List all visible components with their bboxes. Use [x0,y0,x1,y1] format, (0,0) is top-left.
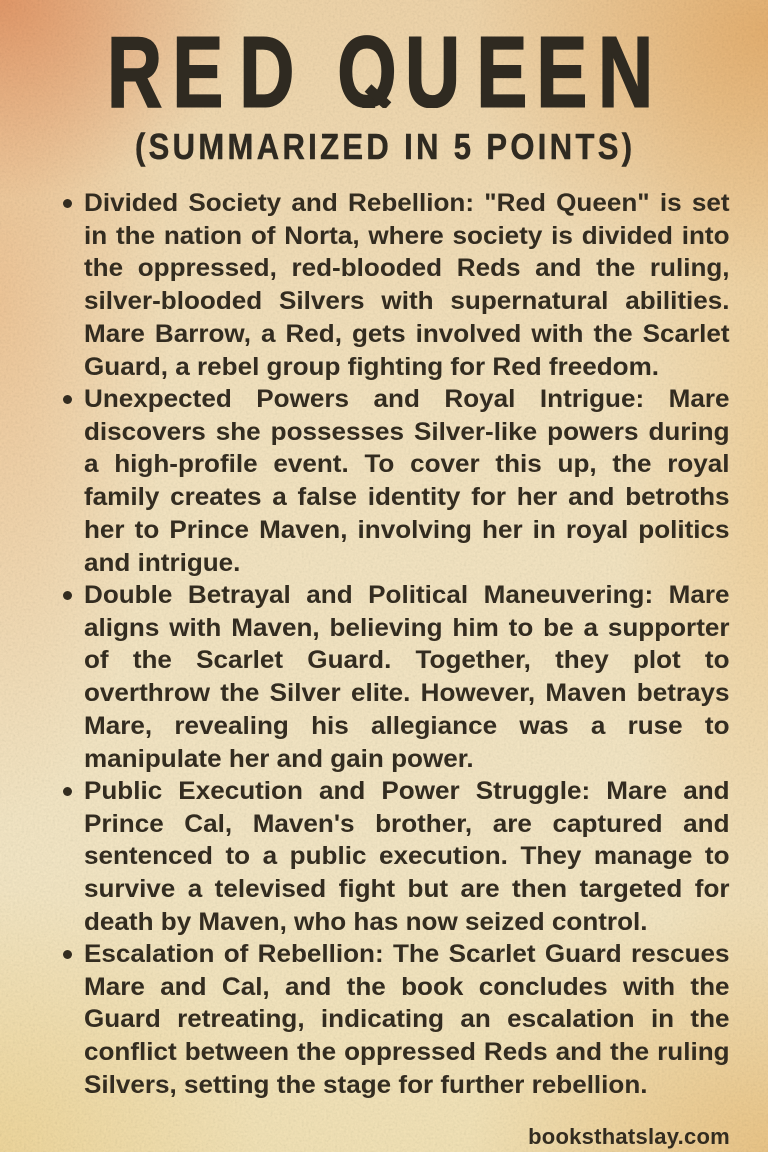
point 2: unexpected powers [63,386,730,576]
point 1: divided society: the oppressed, red-blooded Reds and the ruling, [84,255,730,282]
title text: RED QUEEN [107,16,653,128]
point 1: divided society: in the nation of Norta, where society is divided into [84,223,730,250]
point 3 text [84,582,730,772]
point 2: unexpected powers: discovers she possesses Silver-like powers during [84,419,730,446]
point 4: public execution [63,778,730,936]
footer: website: booksthatslay.com [528,1124,730,1149]
point 2: unexpected powers: family creates a false identity for her and betroths [84,484,730,511]
point 5: escalation of rebellion: Silvers, setting the stage for further rebellion. [84,1072,648,1099]
point 1: divided society: silver-blooded Silvers with supernatural abilities. [84,288,730,315]
point 1 text [84,190,730,380]
point 3: double betrayal: overthrow the Silver elite. However, Maven betrays [84,680,730,707]
point 2: unexpected powers: Unexpected Powers and Royal Intrigue: Mare [84,386,730,413]
point 4: public execution: survive a televised fight but are then targeted for [84,876,730,903]
point 2: unexpected powers: her to Prince Maven, involving her in royal politics [84,517,730,544]
point 3: double betrayal: Mare, revealing his allegiance was a ruse to [84,713,730,740]
point 3: double betrayal: Double Betrayal and Political Maneuvering: Mare [84,582,730,609]
point 4 text [84,778,730,936]
point 4: public execution: death by Maven, who has now seized control. [84,909,647,936]
point 4: public execution: Public Execution and Power Struggle: Mare and [84,778,730,805]
bullet [63,787,72,796]
point 3: double betrayal: of the Scarlet Guard. Together, they plot to [84,647,730,674]
bullet [63,950,72,959]
point 2: unexpected powers: and intrigue. [84,550,240,576]
bullet [63,199,72,208]
point 5: escalation of rebellion: Escalation of Rebellion: The Scarlet Guard rescues [84,941,730,968]
point 2 text [84,386,730,576]
point 1: divided society: Divided Society and Rebellion: "Red Queen" is set [84,190,730,217]
point 4: public execution: Prince Cal, Maven's brother, are captured and [84,811,730,838]
bullet [63,591,72,600]
point 1: divided society: Guard, a rebel group fighting for Red freedom. [84,354,659,380]
point 5: escalation of rebellion: Mare and Cal, and the book concludes with the [84,974,730,1001]
point 5: escalation of rebellion [63,941,730,1099]
point 3: double betrayal [63,582,730,772]
title text [111,35,649,108]
title [111,35,649,168]
point 3: double betrayal: manipulate her and gain power. [84,746,474,772]
point 1: divided society: Mare Barrow, a Red, gets involved with the Scarlet [84,321,730,348]
point 3: double betrayal: aligns with Maven, believing him to be a supporter [84,615,730,642]
point 5 text [84,941,730,1099]
point 1: divided society [63,190,730,380]
point 5: escalation of rebellion: conflict between the oppressed Reds and the ruling [84,1039,730,1066]
bullet [63,395,72,404]
point 2: unexpected powers: a high-profile event. To cover this up, the royal [84,451,730,478]
subtitle: (SUMMARIZED IN 5 POINTS) [135,128,632,168]
point 5: escalation of rebellion: Guard retreating, indicating an escalation in the [84,1006,730,1033]
point 4: public execution: sentenced to a public execution. They manage to [84,843,730,870]
